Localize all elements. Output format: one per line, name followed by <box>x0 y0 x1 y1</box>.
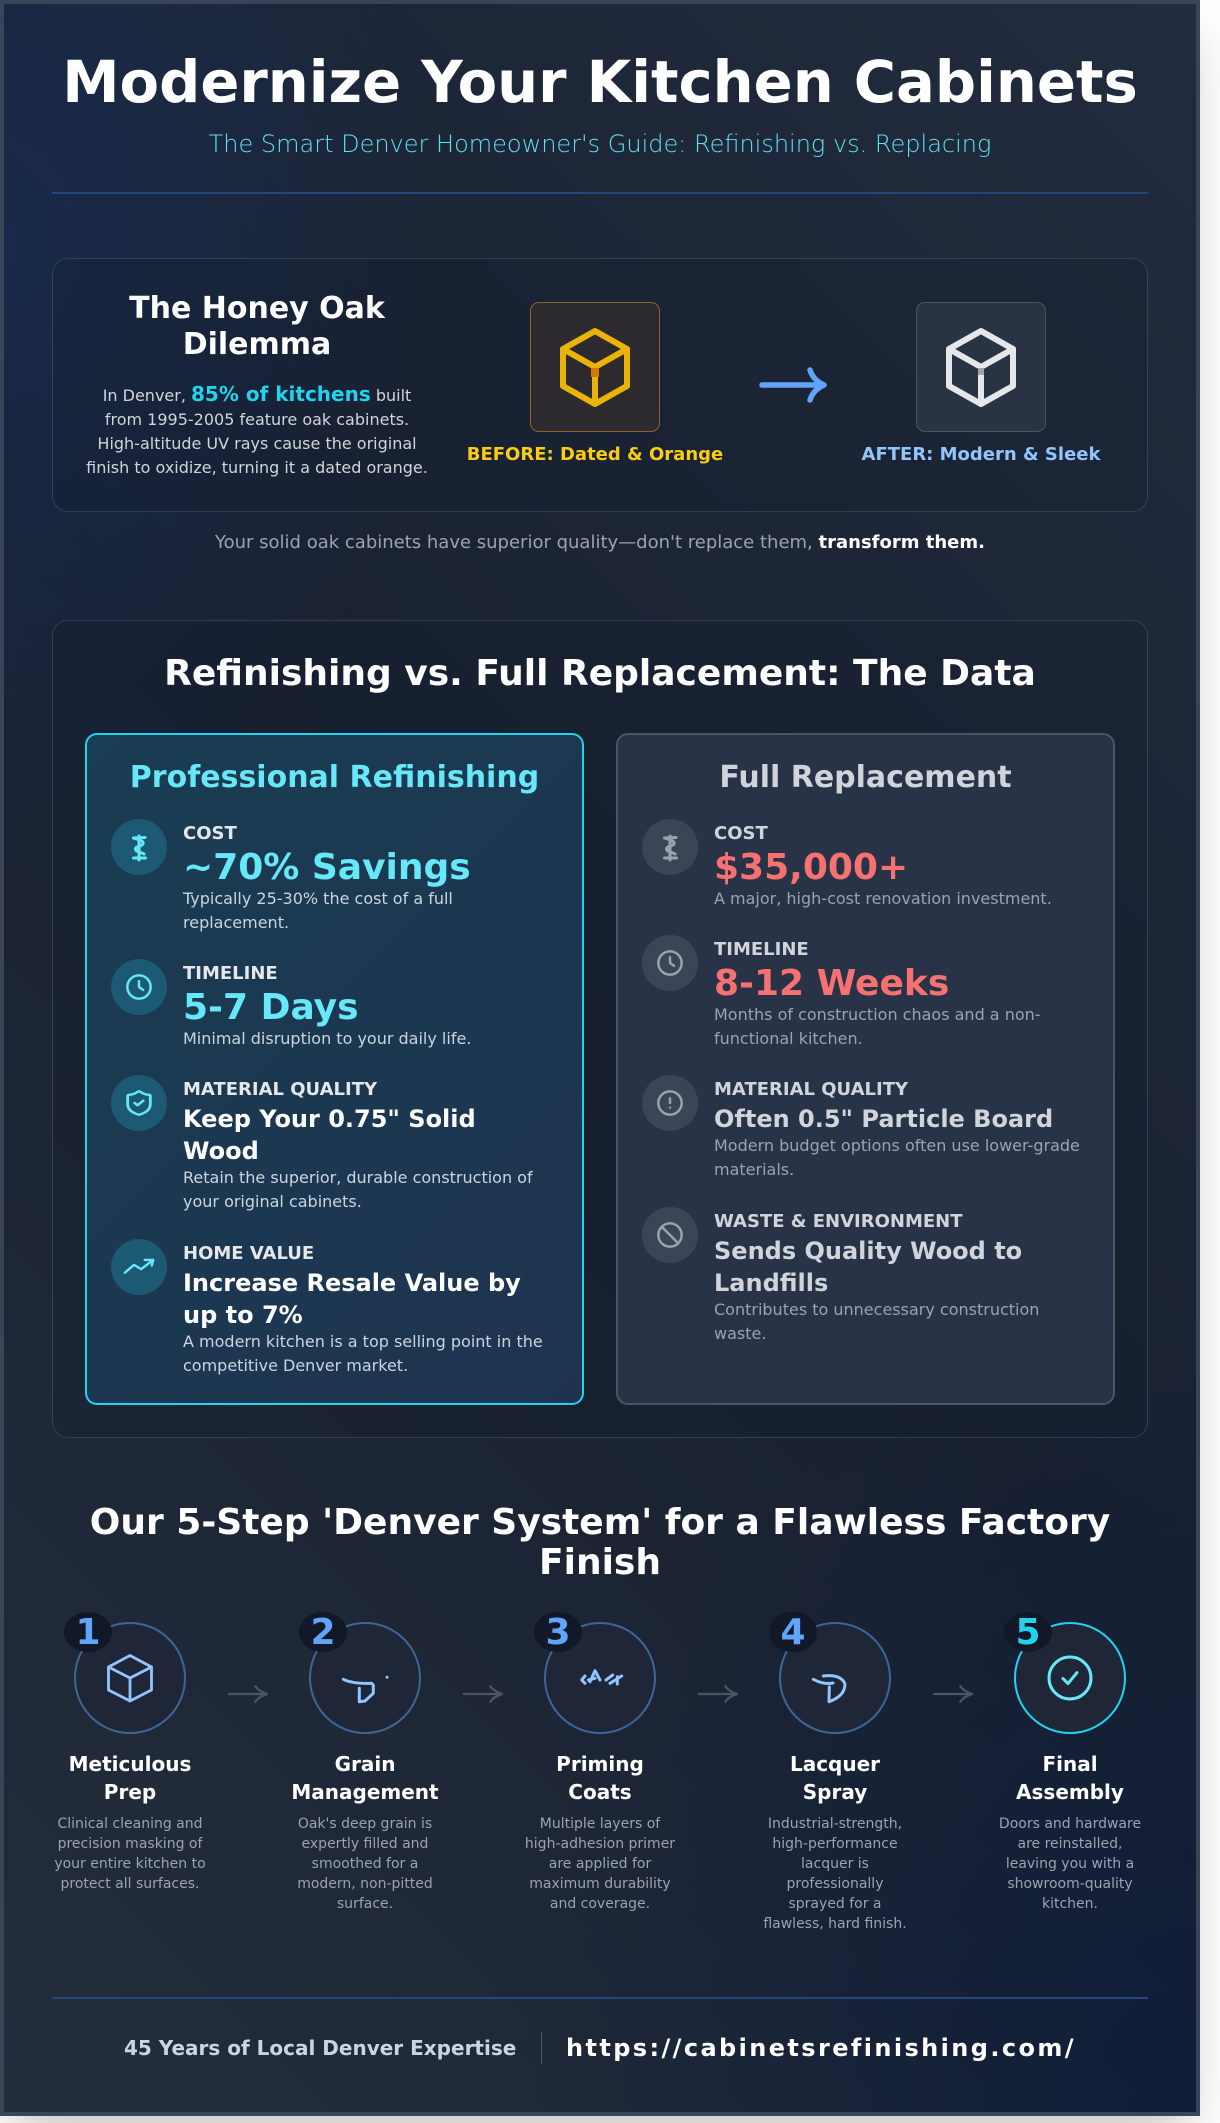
step description: Clinical cleaning and <box>57 1816 203 1832</box>
item: waste and environment <box>642 1207 1039 1343</box>
icon: check ring <box>1014 1622 1126 1734</box>
card heading: Full Replacement <box>719 760 1012 795</box>
card: professional refinishing <box>85 733 584 1405</box>
arrow: before to after <box>759 367 827 403</box>
step description <box>970 1814 1170 1914</box>
text: cost <box>714 823 1052 908</box>
step description: expertly filled and <box>302 1836 428 1852</box>
arrow: step 1 to 2 <box>228 1685 268 1703</box>
arrow: step 2 to 3 <box>462 1685 504 1703</box>
text: cost: ~70% Savings <box>183 847 471 888</box>
step description: Industrial-strength, <box>768 1816 902 1832</box>
step title: Management <box>291 1780 439 1804</box>
text: material quality: your original cabinets. <box>183 1192 362 1211</box>
text: timeline: Minimal disruption to your daily life. <box>183 1029 471 1048</box>
text: timeline: 5-7 Days <box>183 987 359 1028</box>
label: after: AFTER: Modern & Sleek <box>862 444 1100 465</box>
text: cost: COST <box>183 823 237 844</box>
arrow: step 3 to 4 <box>698 1685 738 1703</box>
icon: dollar <box>111 819 167 875</box>
text: waste: WASTE & ENVIRONMENT <box>714 1211 963 1232</box>
text: timeline: 8-12 Weeks <box>714 963 949 1004</box>
panel: data comparison <box>52 620 1148 1438</box>
step title: Meticulous <box>69 1752 191 1776</box>
text: cost <box>182 823 471 932</box>
heading: comparison: Refinishing vs. Full Replacement: The Data <box>164 653 1036 694</box>
step description <box>297 1816 433 1912</box>
badge: 3: 3 <box>545 1612 571 1653</box>
step description: Doors and hardware <box>999 1816 1141 1832</box>
item: cost <box>642 819 1052 908</box>
text: timeline: functional kitchen. <box>714 1029 863 1048</box>
text: timeline: TIMELINE <box>183 963 278 984</box>
text: dilemma description <box>86 382 428 477</box>
step title <box>291 1752 439 1804</box>
text: home value: up to 7% <box>183 1301 303 1329</box>
step title <box>556 1752 644 1804</box>
icon: alert <box>642 1075 698 1131</box>
step title: Lacquer <box>790 1752 880 1776</box>
footer <box>124 2030 1074 2066</box>
step description: protect all surfaces. <box>61 1876 199 1892</box>
icon: modern cabinet box <box>916 302 1046 432</box>
step description: are reinstalled, <box>1017 1836 1122 1852</box>
text: dilemma description: High-altitude UV rays cause the original <box>97 434 417 453</box>
icon: clock <box>642 935 698 991</box>
item: timeline <box>111 959 471 1048</box>
step 5 <box>999 1612 1141 1912</box>
card: full replacement <box>616 733 1115 1405</box>
step description: maximum durability <box>529 1876 671 1892</box>
footer: website url: https://cabinetsrefinishing.com/ <box>566 2034 1076 2062</box>
footer: expertise: 45 Years of Local Denver Expertise <box>124 2036 516 2060</box>
text: material quality: Keep Your 0.75" Solid <box>183 1105 476 1133</box>
icon: box ring <box>74 1622 186 1734</box>
text: material quality: materials. <box>714 1160 794 1179</box>
icon: clock <box>111 959 167 1015</box>
step description: Multiple layers of <box>540 1816 660 1832</box>
badge: 2 <box>299 1612 347 1652</box>
step description: lacquer is <box>801 1856 869 1872</box>
text: waste <box>714 1211 1039 1343</box>
icon: ban <box>642 1207 698 1263</box>
step description <box>54 1816 206 1892</box>
step title: Final <box>1042 1752 1098 1776</box>
text: dilemma description: from 1995-2005 feature oak cabinets. <box>105 410 409 429</box>
text: home value: Increase Resale Value by <box>183 1269 521 1297</box>
text: home value <box>183 1243 543 1375</box>
icon: orange cabinet box <box>530 302 660 432</box>
step title <box>970 1750 1170 1806</box>
text: cost: A major, high-cost renovation investment. <box>714 889 1052 908</box>
step description: kitchen. <box>1042 1896 1098 1912</box>
icon: grain ring <box>309 1622 421 1734</box>
step title <box>69 1752 191 1804</box>
text: waste: Landfills <box>714 1269 828 1297</box>
icon: dollar <box>642 819 698 875</box>
text: waste: Contributes to unnecessary construction <box>714 1300 1039 1319</box>
heading: dilemma: The Honey Oak <box>129 291 385 326</box>
card heading: Professional Refinishing <box>130 760 539 795</box>
icon: shield <box>111 1075 167 1131</box>
text: home value: HOME VALUE <box>183 1243 314 1264</box>
step description: high-performance <box>772 1836 898 1852</box>
text: transform note: Your solid oak cabinets have superior quality—don't replace them, transform them. <box>215 532 985 553</box>
panel: the honey oak dilemma <box>52 258 1148 512</box>
text: cost: Typically 25-30% the cost of a full <box>183 889 453 908</box>
icon: trending up <box>111 1239 167 1295</box>
badge: 4: 4 <box>780 1612 806 1653</box>
text: material quality: MATERIAL QUALITY <box>183 1079 377 1100</box>
step description: are applied for <box>549 1856 651 1872</box>
step title: Prep <box>104 1780 156 1804</box>
subtitle: The Smart Denver Homeowner's Guide: Refinishing vs. Replacing <box>209 130 991 158</box>
step 3 <box>525 1612 675 1912</box>
step title: Assembly <box>1016 1780 1124 1804</box>
step description <box>525 1816 675 1912</box>
step description: surface. <box>337 1896 393 1912</box>
text: material quality: Modern budget options often use lower-grade <box>714 1136 1080 1155</box>
text: cost: COST <box>714 823 768 844</box>
label: before: BEFORE: Dated & Orange <box>467 444 723 465</box>
step description: and coverage. <box>550 1896 650 1912</box>
badge: 5 <box>1004 1612 1052 1652</box>
badge: 4 <box>769 1612 817 1652</box>
step title <box>790 1752 880 1804</box>
step title: Priming <box>556 1752 644 1776</box>
step 1 <box>54 1612 206 1892</box>
heading: five step system: Our 5-Step 'Denver System' for a Flawless Factory <box>90 1502 1110 1543</box>
step description: leaving you with a <box>1006 1856 1134 1872</box>
text: material quality <box>183 1079 533 1211</box>
step title: Grain <box>335 1752 395 1776</box>
after: modern and sleek <box>862 302 1101 465</box>
text: timeline: TIMELINE <box>714 939 809 960</box>
step description: smoothed for a <box>312 1856 418 1872</box>
heading: dilemma: Dilemma <box>183 327 331 362</box>
badge: 3 <box>534 1612 582 1652</box>
heading: five step system: Finish <box>539 1542 661 1583</box>
step description: Oak's deep grain is <box>298 1816 432 1832</box>
item: cost <box>111 819 471 932</box>
text: dilemma description: finish to oxidize, turning it a dated orange. <box>86 458 428 477</box>
step description <box>763 1816 907 1932</box>
step description: showroom-quality <box>1007 1876 1133 1892</box>
step description: high-adhesion primer <box>525 1836 675 1852</box>
item: material quality <box>642 1075 1080 1179</box>
text: timeline <box>714 939 1041 1048</box>
badge: 5: 5 <box>1015 1612 1041 1653</box>
step description: flawless, hard finish. <box>763 1916 907 1932</box>
badge: 2: 2 <box>310 1612 336 1653</box>
text: material quality: Retain the superior, durable construction of <box>183 1168 533 1187</box>
item: timeline <box>642 935 1041 1048</box>
step 4 <box>763 1612 907 1932</box>
step description: modern, non-pitted <box>297 1876 433 1892</box>
heading: five step system <box>90 1502 1110 1583</box>
text: cost: $35,000+ <box>714 847 908 888</box>
text: timeline <box>183 963 471 1048</box>
badge: 1: 1 <box>75 1612 101 1653</box>
heading: dilemma <box>129 291 386 362</box>
badge: 1 <box>64 1612 112 1652</box>
text: waste: waste. <box>714 1324 766 1343</box>
text: home value: A modern kitchen is a top selling point in the <box>183 1332 543 1351</box>
text: waste: Sends Quality Wood to <box>714 1237 1022 1265</box>
before: dated and orange <box>467 302 723 465</box>
icon: spray ring <box>779 1622 891 1734</box>
text: material quality: MATERIAL QUALITY <box>714 1079 908 1100</box>
text: home value: competitive Denver market. <box>183 1356 408 1375</box>
text: material quality: Often 0.5" Particle Board <box>714 1105 1053 1133</box>
step description: professionally <box>786 1876 884 1892</box>
icon: primer ring <box>544 1622 656 1734</box>
title: Modernize Your Kitchen Cabinets <box>62 49 1138 116</box>
text: cost: replacement. <box>183 913 289 932</box>
text: timeline: Months of construction chaos and a non- <box>714 1005 1041 1024</box>
item: home value <box>111 1239 543 1375</box>
step title: Spray <box>803 1780 867 1804</box>
step description: precision masking of <box>58 1836 202 1852</box>
arrow: step 4 to 5 <box>932 1685 974 1703</box>
item: material quality <box>111 1075 533 1211</box>
text: dilemma description: In Denver, 85% of kitchens built <box>103 382 411 406</box>
step 2 <box>291 1612 439 1912</box>
text: material quality: Wood <box>183 1137 259 1165</box>
step description: your entire kitchen to <box>54 1856 206 1872</box>
step title: Coats <box>568 1780 632 1804</box>
step description: sprayed for a <box>788 1896 882 1912</box>
text: material quality <box>714 1079 1080 1179</box>
